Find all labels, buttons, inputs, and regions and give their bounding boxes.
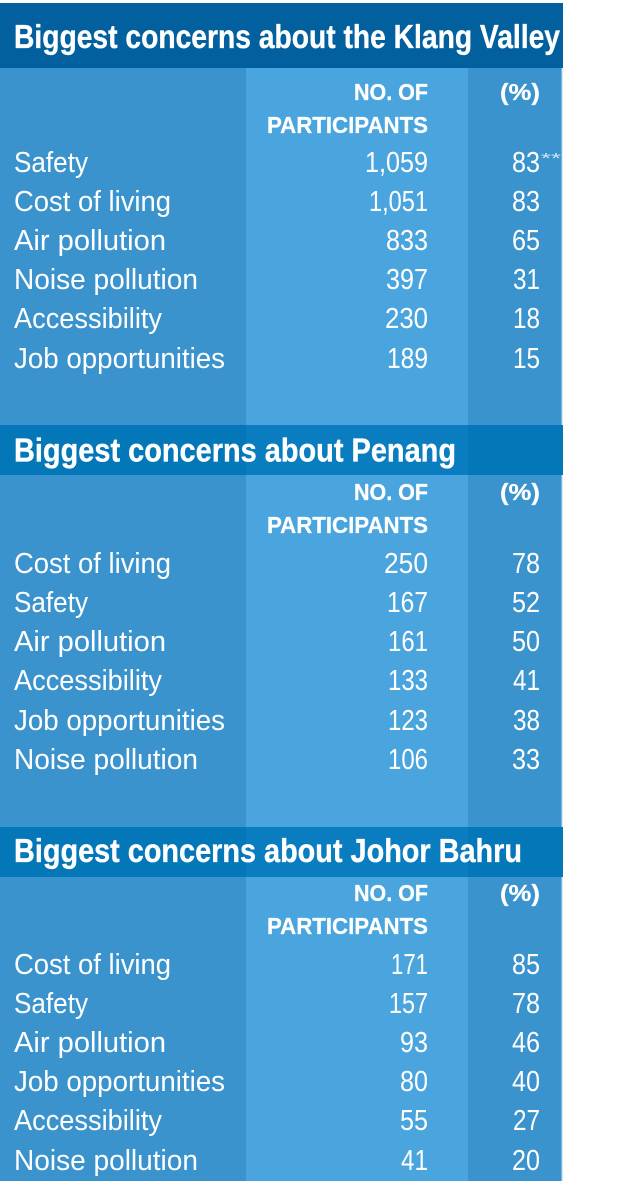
data rows: Accessibility xyxy=(14,665,162,697)
data rows: Job opportunities xyxy=(14,1066,225,1098)
panel: Klang Valley xyxy=(0,3,563,375)
data rows: 52 xyxy=(512,587,540,619)
data rows: 78 xyxy=(512,988,540,1020)
panel: Penang xyxy=(0,425,563,776)
column headers xyxy=(267,880,540,939)
data rows: 27 xyxy=(513,1105,540,1137)
data rows: 123 xyxy=(388,705,428,737)
data rows: Noise pollution xyxy=(14,264,198,296)
data rows: 15 xyxy=(513,343,540,375)
data rows xyxy=(14,548,540,776)
data rows xyxy=(14,147,561,375)
column headers: NO. OF xyxy=(354,479,428,505)
data rows: 106 xyxy=(388,744,428,776)
data rows: 78 xyxy=(512,548,540,580)
panel: Johor Bahru xyxy=(0,827,563,1177)
data rows: 41 xyxy=(513,665,540,697)
data rows: 31 xyxy=(513,264,540,296)
data rows: 833 xyxy=(386,225,428,257)
data rows: 93 xyxy=(400,1027,428,1059)
data rows: 65 xyxy=(512,225,540,257)
data rows: 133 xyxy=(388,665,428,697)
data rows: 167 xyxy=(387,587,428,619)
heading: Klang Valley xyxy=(0,3,563,68)
data rows: Cost of living xyxy=(14,548,171,580)
column headers xyxy=(267,479,540,538)
data rows xyxy=(14,949,540,1177)
data rows: 1,059 xyxy=(365,147,428,179)
data rows: 55 xyxy=(400,1105,428,1137)
data rows: 18 xyxy=(513,303,540,335)
data rows: Accessibility xyxy=(14,1105,162,1137)
data rows: 189 xyxy=(387,343,428,375)
data rows: Noise pollution xyxy=(14,744,198,776)
data rows: 41 xyxy=(401,1145,428,1177)
data rows: 83 xyxy=(512,147,540,179)
data rows: Safety xyxy=(14,988,88,1020)
data rows: 83 xyxy=(512,186,540,218)
data rows: 40 xyxy=(512,1066,540,1098)
data rows: Safety xyxy=(14,587,88,619)
data rows: 1,051 xyxy=(369,186,428,218)
column headers: PARTICIPANTS xyxy=(267,112,428,138)
data rows: 50 xyxy=(512,626,540,658)
data rows: 85 xyxy=(512,949,540,981)
data rows: Air pollution xyxy=(14,1027,166,1059)
data rows: ** xyxy=(541,150,561,167)
data rows: 33 xyxy=(512,744,540,776)
data rows: 230 xyxy=(385,303,428,335)
data rows: Job opportunities xyxy=(14,705,225,737)
heading: Johor Bahru xyxy=(0,827,563,877)
column headers: NO. OF xyxy=(354,79,428,105)
column headers: (%) xyxy=(500,79,540,105)
data rows: Air pollution xyxy=(14,626,166,658)
heading: Johor Bahru: Biggest concerns about Johor Bahru xyxy=(14,832,522,869)
column headers: NO. OF xyxy=(354,880,428,906)
data rows: 161 xyxy=(388,626,428,658)
data rows: 38 xyxy=(513,705,540,737)
column headers xyxy=(267,79,540,138)
data rows: Job opportunities xyxy=(14,343,225,375)
data rows: 157 xyxy=(389,988,428,1020)
data rows: Noise pollution xyxy=(14,1145,198,1177)
data rows: 171 xyxy=(391,949,428,981)
column headers: (%) xyxy=(500,479,540,505)
column headers: PARTICIPANTS xyxy=(267,913,428,939)
data rows: 250 xyxy=(384,548,428,580)
data rows: 397 xyxy=(386,264,428,296)
data rows: Safety xyxy=(14,147,88,179)
data rows: 80 xyxy=(400,1066,428,1098)
heading: Penang xyxy=(0,425,563,475)
data rows: 20 xyxy=(512,1145,540,1177)
column headers: (%) xyxy=(500,880,540,906)
column headers: PARTICIPANTS xyxy=(267,512,428,538)
data rows: 46 xyxy=(512,1027,540,1059)
data rows: Cost of living xyxy=(14,186,171,218)
data rows: Cost of living xyxy=(14,949,171,981)
data rows: Air pollution xyxy=(14,225,166,257)
heading: Penang: Biggest concerns about Penang xyxy=(14,432,456,468)
data rows: Accessibility xyxy=(14,303,162,335)
